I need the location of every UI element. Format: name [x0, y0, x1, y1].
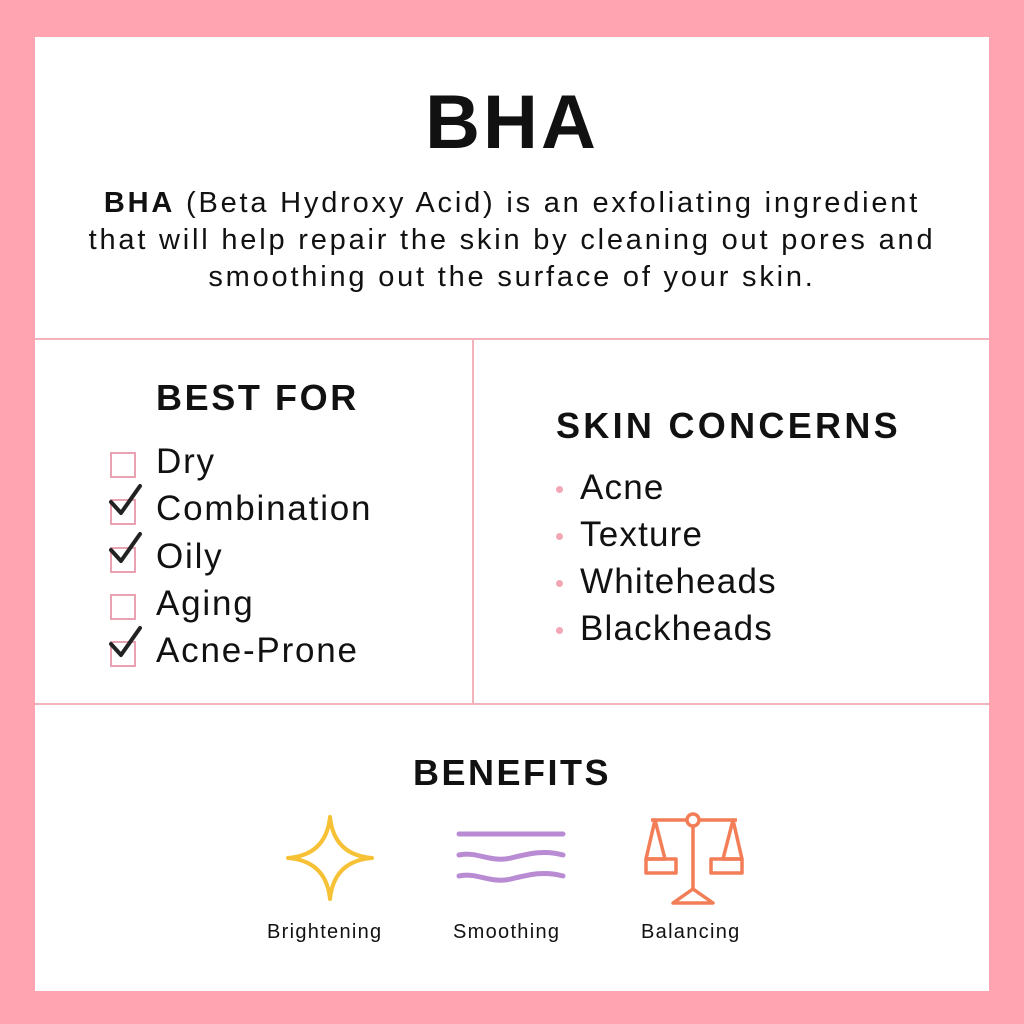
labels: Balancing	[641, 921, 741, 943]
description: BHA (Beta Hydroxy Acid) is an exfoliating ingredient	[104, 187, 920, 219]
labels	[267, 921, 741, 943]
description: that will help repair the skin by cleaning out pores and	[89, 224, 935, 256]
heading: benefits: BENEFITS	[413, 752, 611, 793]
panel: benefits	[267, 752, 744, 943]
checklist: Dry	[156, 442, 216, 481]
concern list	[556, 468, 777, 648]
title: BHA	[425, 80, 599, 165]
panel: skin concerns	[556, 405, 901, 648]
labels: Smoothing	[453, 921, 560, 943]
heading: best for: BEST FOR	[156, 377, 359, 418]
checklist: Combination	[156, 489, 372, 528]
checklist: Aging	[156, 584, 255, 623]
panel: best for	[108, 377, 372, 670]
concern list: Whiteheads	[580, 562, 777, 601]
labels: Brightening	[267, 921, 382, 943]
description: smoothing out the surface of your skin.	[208, 261, 816, 293]
icon: waves	[456, 832, 566, 883]
icon: star	[286, 815, 374, 901]
checklist: Oily	[156, 537, 223, 576]
icon: scale	[644, 812, 744, 905]
heading: skin concerns: SKIN CONCERNS	[556, 405, 901, 446]
concern list: Blackheads	[580, 609, 773, 648]
concern list: Texture	[580, 515, 703, 554]
description	[89, 187, 935, 293]
checklist: Acne-Prone	[156, 631, 359, 670]
checklist	[108, 442, 372, 670]
concern list: Acne	[580, 468, 665, 507]
